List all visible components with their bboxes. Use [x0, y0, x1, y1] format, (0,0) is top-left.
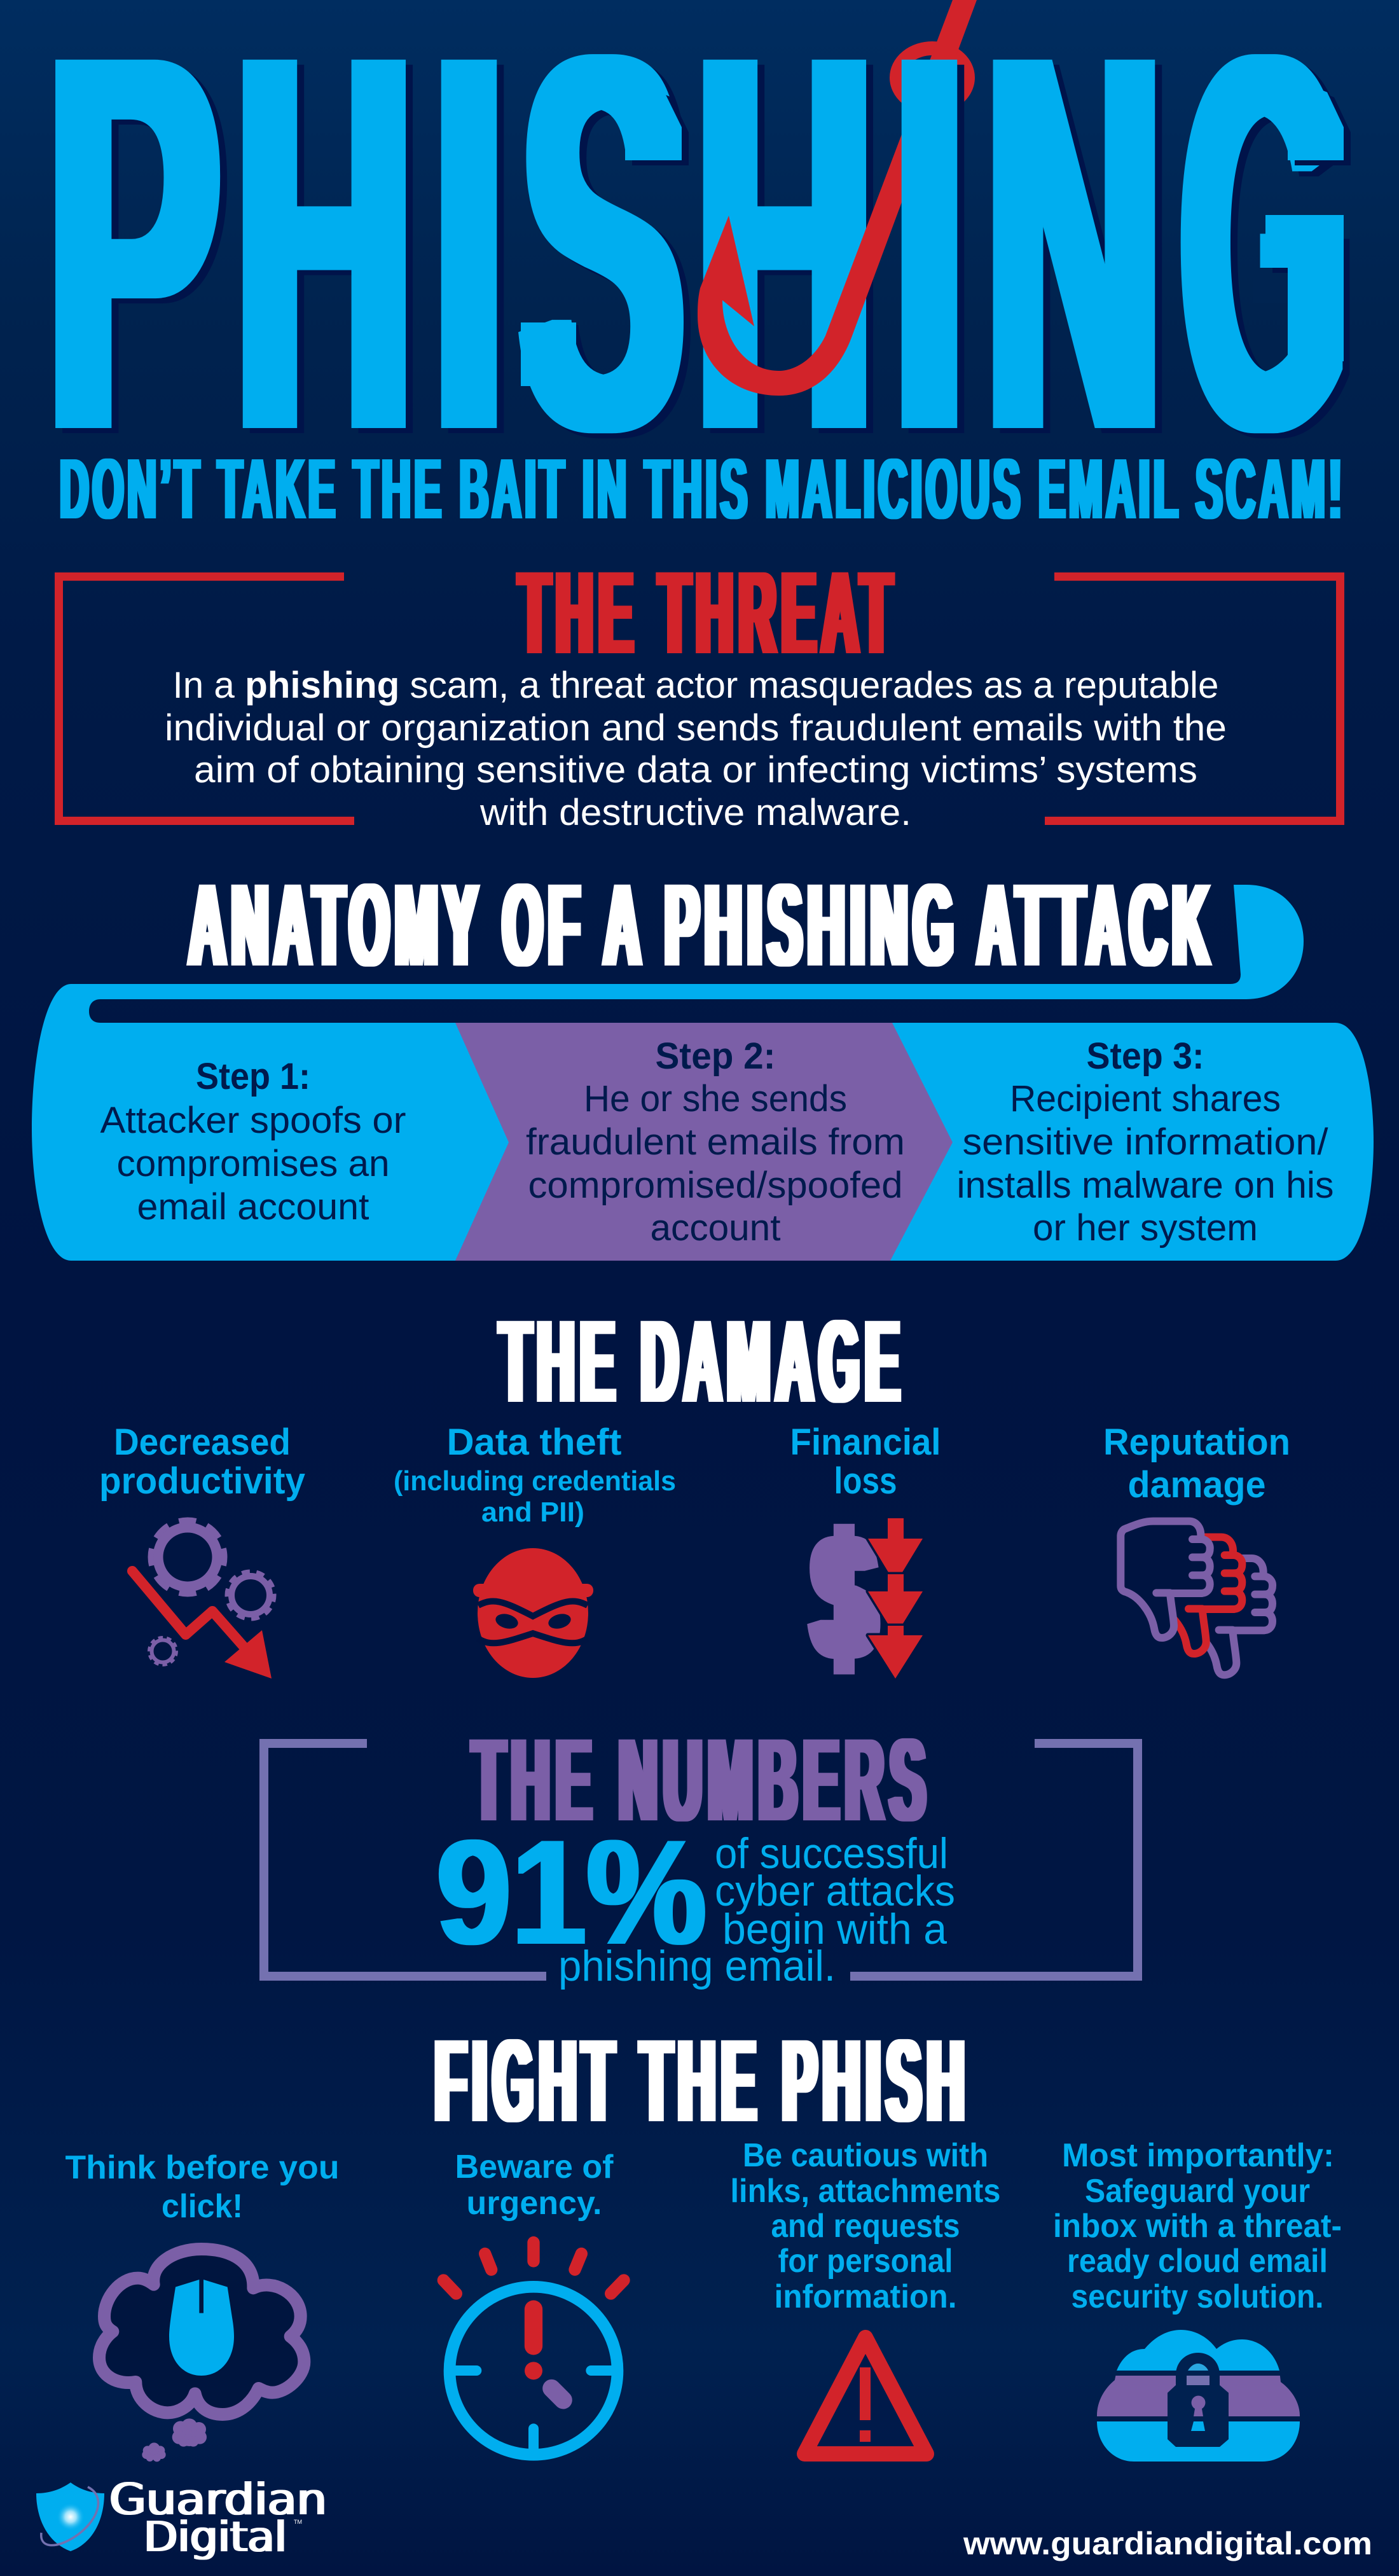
step 1 text: Step 1: [196, 1056, 310, 1097]
step 2 purple chevron [455, 1023, 953, 1261]
step 1 text: email account [137, 1186, 369, 1228]
step 2 text: account [650, 1207, 781, 1249]
threat description: aim of obtaining sensitive data or infecting victims’ systems [194, 749, 1197, 791]
icon: alarm clock [443, 2243, 624, 2455]
step 2 text: Step 2: [655, 1035, 776, 1077]
label [99, 1422, 305, 1502]
label [394, 1422, 676, 1528]
step 1 text [100, 1056, 406, 1228]
label [455, 2149, 614, 2222]
step 1 text: compromises an [117, 1143, 389, 1184]
label: Decreased [114, 1422, 291, 1463]
tip: be cautious [730, 2137, 1001, 2454]
G terminal squaring [1253, 76, 1351, 361]
label: click! [162, 2188, 243, 2225]
panel: the threat: THE THREAT [519, 548, 898, 679]
label: Be cautious with [743, 2137, 988, 2174]
step 1 text: Attacker spoofs or [100, 1100, 406, 1141]
damage item: reputation damage [1103, 1422, 1290, 1675]
icon: mouse in thought cloud [99, 2249, 304, 2462]
logo wordmark: Guardian [109, 2474, 327, 2525]
icon: thumbs down [1120, 1521, 1272, 1675]
label: and PII) [481, 1497, 584, 1528]
step 2 text: He or she sends [584, 1078, 847, 1119]
label [1103, 1422, 1290, 1506]
tip: think before you click [65, 2149, 340, 2462]
numbers bracket frame [264, 1743, 1138, 1976]
scroll ribbon [32, 885, 1374, 1261]
logo: Guardian Digital [36, 2474, 327, 2561]
threat description: with destructive malware. [479, 792, 911, 833]
step 3 text: installs malware on his [956, 1165, 1334, 1206]
statistic: 91%: 91% [436, 1808, 706, 1976]
label: (including credentials [394, 1465, 676, 1497]
panel: the numbers [264, 1715, 1138, 1990]
tip: beware of urgency [443, 2149, 624, 2455]
icon: shield [36, 2483, 104, 2551]
label: Most importantly: [1062, 2137, 1334, 2174]
label: Data theft [446, 1422, 622, 1463]
tip: safeguard your inbox [1053, 2137, 1342, 2466]
label: Beware of [455, 2149, 614, 2185]
S terminal squaring [521, 76, 689, 386]
step 2 text [526, 1035, 905, 1249]
label: inbox with a threat- [1053, 2208, 1342, 2245]
statistic caption: phishing email. [558, 1942, 836, 1990]
label [730, 2137, 1001, 2315]
label: Safeguard your [1085, 2173, 1310, 2210]
step 2 text: compromised/spoofed [528, 1165, 903, 1206]
label [790, 1422, 941, 1502]
icon: red fish hook [698, 0, 977, 396]
logo wordmark: Digital [144, 2512, 287, 2561]
step 3 text: Recipient shares [1010, 1078, 1281, 1119]
label: urgency. [467, 2185, 602, 2222]
icon: warning triangle [804, 2337, 927, 2454]
threat description: individual or organization and sends fraudulent emails with the [165, 707, 1227, 749]
step 3 text: or her system [1033, 1207, 1258, 1249]
label [1053, 2137, 1342, 2315]
label: productivity [99, 1460, 305, 1502]
icon: cloud with padlock [1097, 2330, 1300, 2462]
icon: masked thief [473, 1548, 593, 1678]
panel: the threat [59, 548, 1340, 833]
step 2 text: fraudulent emails from [526, 1121, 905, 1163]
title: PHISHING with fish hook [48, 0, 1351, 542]
statistic caption: of successful [715, 1829, 948, 1878]
label: loss [834, 1460, 897, 1502]
label: Think before you [65, 2149, 340, 2186]
icon: dollar sign with down arrows: $ [813, 1494, 874, 1700]
statistic caption: begin with a [722, 1905, 947, 1953]
label: Reputation [1103, 1422, 1290, 1463]
label: links, attachments [730, 2173, 1001, 2210]
label: and requests [771, 2208, 960, 2245]
threat bracket frame [59, 576, 1340, 821]
statistic caption [558, 1829, 955, 1990]
statistic caption: cyber attacks [715, 1867, 955, 1915]
label: security solution. [1071, 2278, 1324, 2315]
label: Financial [790, 1422, 941, 1463]
panel: three step scroll [32, 885, 1374, 1261]
label: information. [775, 2278, 956, 2315]
step 3 text: sensitive information/ [963, 1121, 1328, 1163]
damage item: decreased productivity [99, 1422, 305, 1679]
step 3 text [956, 1035, 1334, 1249]
label: for personal [778, 2243, 953, 2280]
damage item: data theft [394, 1422, 676, 1678]
label: damage [1128, 1464, 1265, 1506]
logo wordmark: TM [294, 2519, 302, 2525]
icon: gears with falling arrow [132, 1520, 274, 1679]
label: ready cloud email [1067, 2243, 1328, 2280]
logo wordmark [109, 2474, 327, 2561]
threat description [165, 665, 1227, 833]
step 3 text: Step 3: [1086, 1035, 1204, 1077]
label [65, 2149, 340, 2225]
website url: www.guardiandigital.com [963, 2526, 1372, 2561]
threat description: In a phishing scam, a threat actor masquerades as a reputable [173, 665, 1219, 706]
damage item: financial loss [790, 1422, 941, 1700]
